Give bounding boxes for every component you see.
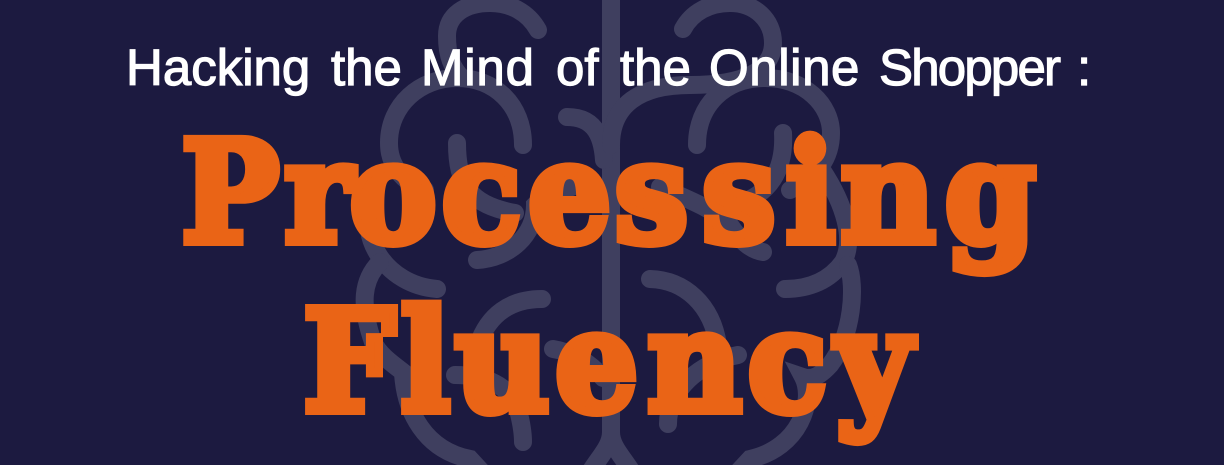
title: kicker line: Online [709, 39, 860, 96]
title: kicker line: the [331, 39, 402, 96]
icon: brain outline [365, 0, 852, 465]
title: kicker line: : [1077, 39, 1091, 96]
title: Processing: Processing [181, 110, 1036, 275]
title: kicker line: of [556, 39, 599, 96]
title: kicker line: the [620, 39, 691, 96]
title: kicker line: Mind [421, 39, 535, 96]
title: kicker line: Shopper [879, 39, 1061, 96]
title: kicker line: Hacking [126, 39, 310, 96]
title: Fluency: Fluency [303, 279, 915, 444]
